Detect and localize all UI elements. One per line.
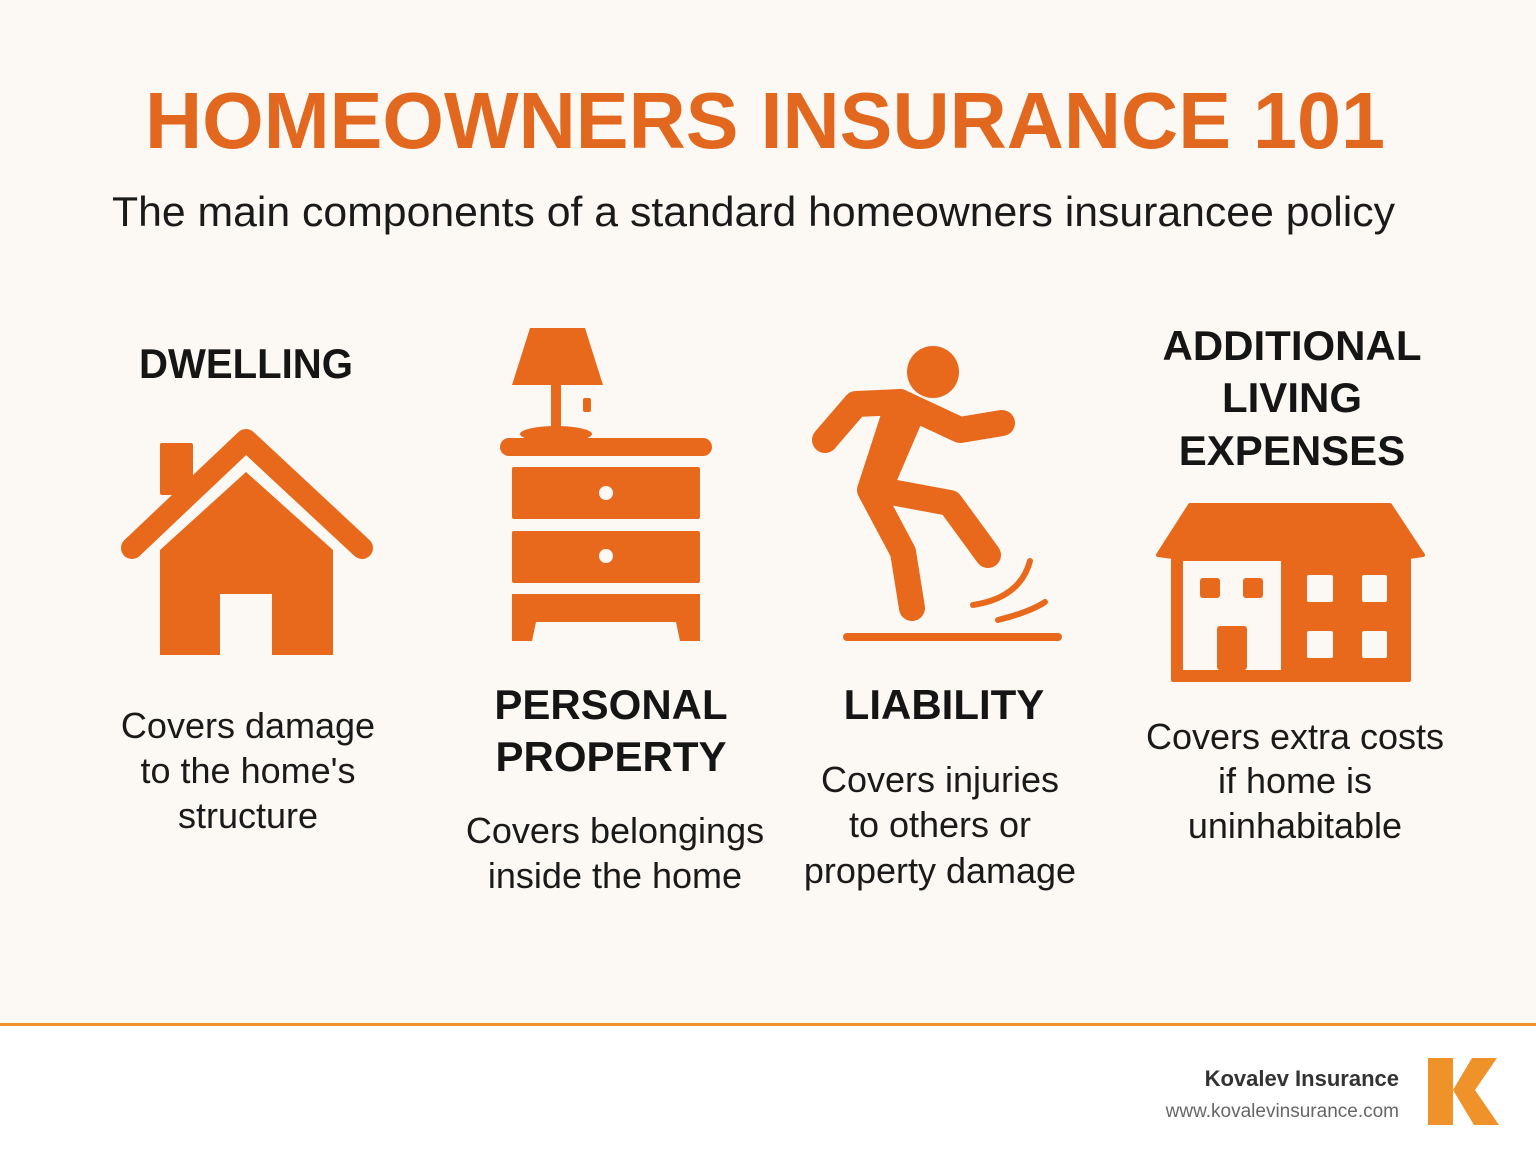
text: personal property description: Covers belongings bbox=[466, 810, 764, 851]
footer brand text: www.kovalevinsurance.com bbox=[1165, 1101, 1399, 1122]
icon: building bbox=[1158, 505, 1423, 680]
heading: additional living expenses: LIVING bbox=[1222, 374, 1362, 421]
text: dwelling description: Covers damage bbox=[121, 705, 375, 746]
text: ALE description: uninhabitable bbox=[1188, 805, 1402, 846]
footer brand text bbox=[1165, 1066, 1399, 1122]
panel: liability bbox=[804, 346, 1076, 891]
text: personal property description: inside the home bbox=[488, 855, 742, 896]
heading: additional living expenses: EXPENSES bbox=[1179, 427, 1405, 474]
panel: dwelling bbox=[121, 340, 375, 836]
heading: personal property: PERSONAL bbox=[494, 681, 728, 728]
heading: personal property: PROPERTY bbox=[495, 733, 727, 780]
text: liability description: to others or bbox=[849, 804, 1031, 845]
text: dwelling description: to the home's bbox=[140, 750, 356, 791]
text: ALE description: Covers extra costs bbox=[1146, 716, 1444, 757]
text: liability description: property damage bbox=[804, 850, 1076, 891]
text: ALE description: if home is bbox=[1218, 760, 1372, 801]
icon: slipping person bbox=[825, 346, 1062, 641]
footer brand text: Kovalev Insurance bbox=[1205, 1066, 1399, 1091]
heading: liability: LIABILITY bbox=[844, 681, 1044, 728]
title: HOMEOWNERS INSURANCE 101 bbox=[145, 76, 1385, 165]
panel: personal property bbox=[466, 328, 764, 896]
icon: house bbox=[132, 440, 362, 655]
heading: dwelling: DWELLING bbox=[139, 340, 353, 387]
logo: K bbox=[1428, 1058, 1499, 1125]
icon: nightstand with lamp bbox=[500, 328, 712, 641]
heading: additional living expenses: ADDITIONAL bbox=[1163, 322, 1421, 369]
text: liability description: Covers injuries bbox=[821, 759, 1059, 800]
subtitle: The main components of a standard homeowners insurancee policy bbox=[112, 188, 1395, 235]
text: dwelling description: structure bbox=[178, 795, 318, 836]
panel: additional living expenses bbox=[1146, 322, 1444, 846]
